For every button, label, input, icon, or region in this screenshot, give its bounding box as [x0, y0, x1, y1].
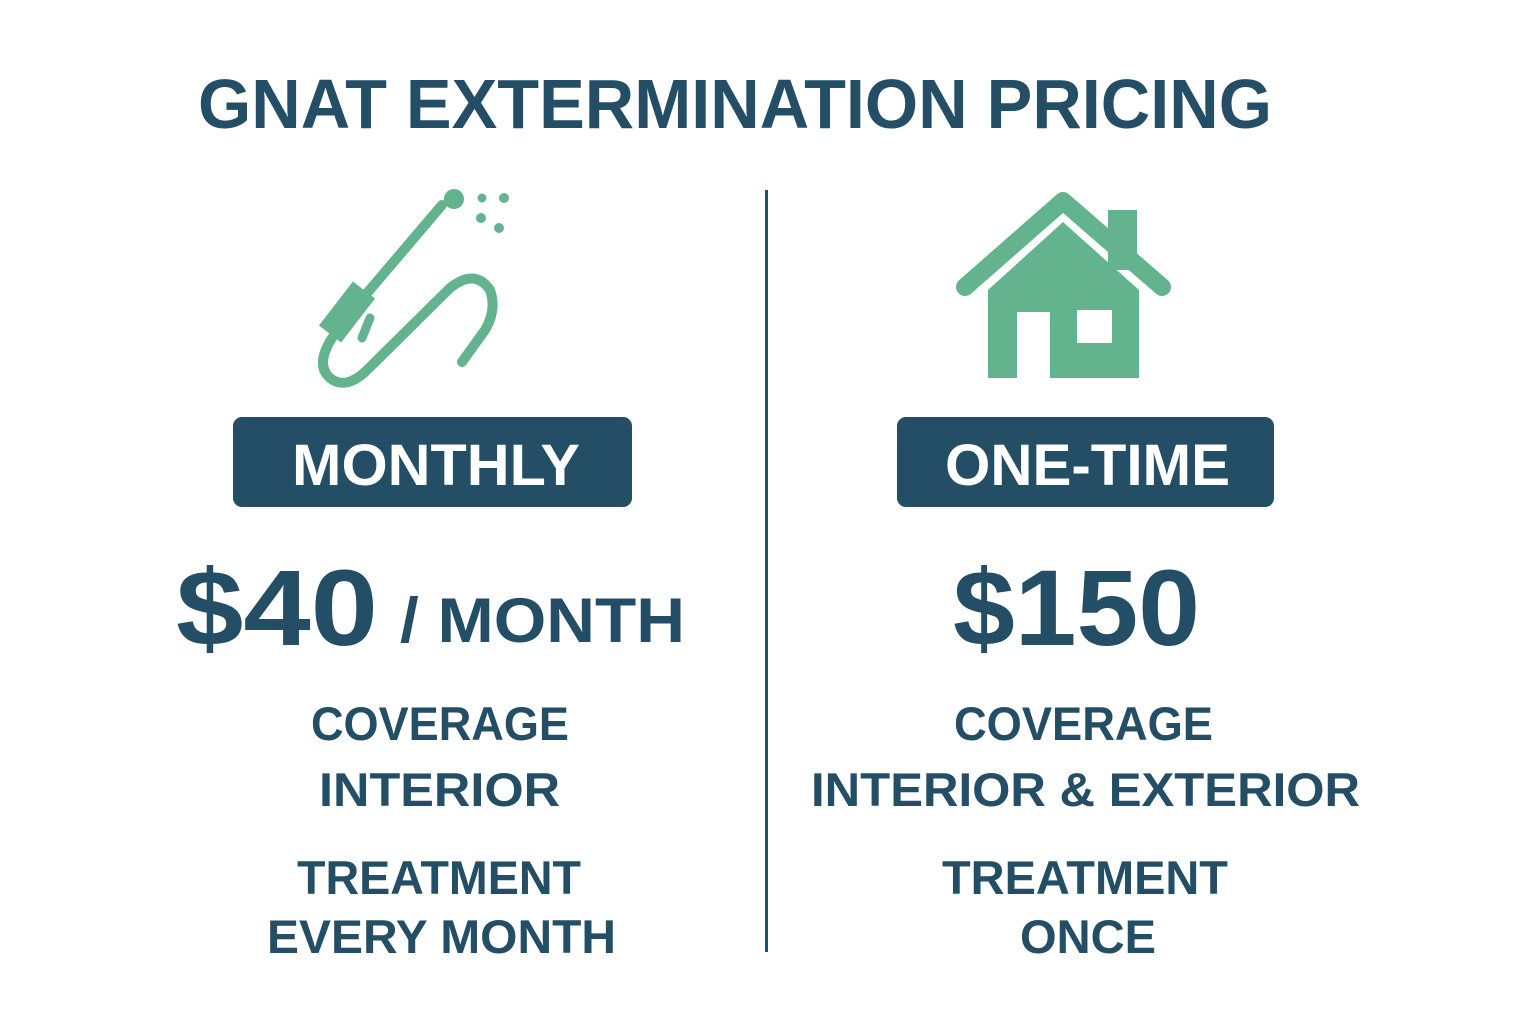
- details: monthly: EVERY MONTH: [267, 910, 616, 963]
- details: one-time: [811, 697, 1360, 963]
- price: monthly: $40: [176, 547, 378, 668]
- details: one-time: ONCE: [1020, 910, 1156, 963]
- icon: sprayer: [323, 189, 509, 383]
- badge: one-time: [897, 417, 1274, 507]
- price: monthly: / MONTH: [400, 586, 685, 656]
- details: monthly: TREATMENT: [297, 851, 581, 904]
- divider: [765, 190, 768, 952]
- badge: one-time: ONE-TIME: [945, 433, 1230, 498]
- details: monthly: COVERAGE: [311, 697, 569, 750]
- details: one-time: INTERIOR & EXTERIOR: [811, 763, 1360, 816]
- details: one-time: TREATMENT: [942, 851, 1228, 904]
- badge: monthly: MONTHLY: [292, 433, 580, 498]
- price: monthly: [176, 547, 685, 668]
- title: GNAT EXTERMINATION PRICING: [198, 65, 1272, 143]
- price: one-time: $150: [953, 547, 1200, 668]
- icon: house: [965, 201, 1162, 378]
- details: monthly: [267, 697, 616, 963]
- details: monthly: INTERIOR: [319, 763, 560, 816]
- badge: monthly: [233, 417, 632, 507]
- details: one-time: COVERAGE: [954, 697, 1213, 750]
